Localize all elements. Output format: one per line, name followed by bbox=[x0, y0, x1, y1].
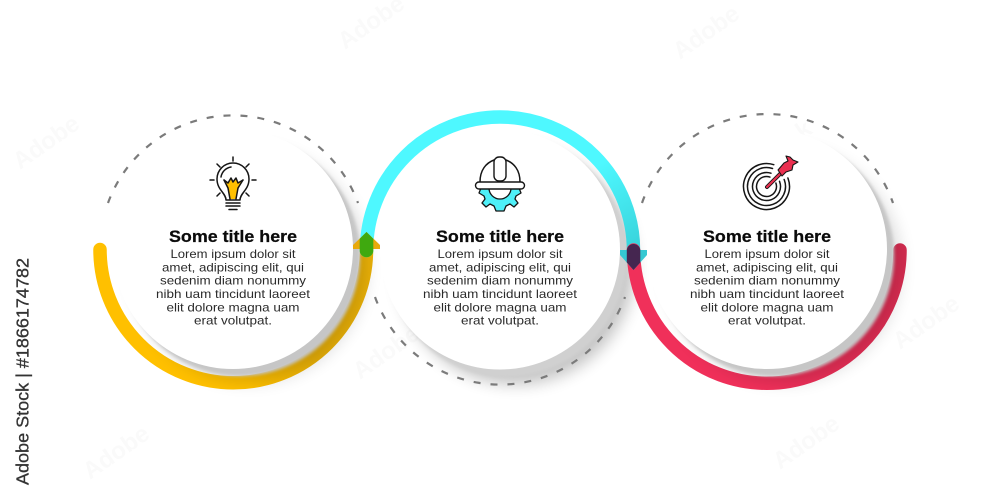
body text: step 3: sedenim diam nonummy bbox=[694, 274, 840, 288]
text: Adobe bbox=[8, 110, 85, 175]
body text: step 2: nibh uam tincidunt laoreet bbox=[423, 287, 578, 301]
body text: step 3: amet, adipiscing elit, qui bbox=[696, 260, 838, 274]
white circle bbox=[647, 129, 887, 369]
icon: helmet and gear bbox=[476, 157, 524, 211]
title: step 2: Some title here bbox=[436, 227, 564, 246]
text: Stock bbox=[748, 115, 818, 175]
body text: step 1: Lorem ipsum dolor sit bbox=[170, 247, 296, 261]
red arc bbox=[634, 250, 900, 383]
arrow: cyan to red junction bbox=[620, 244, 647, 270]
arrow: yellow to cyan junction bbox=[353, 232, 380, 257]
source credit: Adobe Stock | #1866174782 bbox=[12, 258, 32, 485]
title: step 1: Some title here bbox=[169, 227, 297, 246]
yellow arc bbox=[100, 250, 366, 383]
title: step 3: Some title here bbox=[703, 227, 831, 246]
text: Adobe bbox=[348, 320, 425, 385]
body text: step 2: Lorem ipsum dolor sit bbox=[438, 247, 563, 261]
body text: step 2: sedenim diam nonummy bbox=[427, 274, 573, 288]
cyan arc bbox=[366, 117, 634, 251]
panel: step 2 bbox=[366, 117, 634, 385]
text: Adobe bbox=[668, 0, 745, 65]
icon: target with dart bbox=[737, 156, 798, 216]
panel: step 1 bbox=[100, 115, 367, 383]
body text: step 1: erat volutpat. bbox=[194, 314, 272, 328]
body text: step 1 bbox=[156, 247, 311, 328]
body text: step 1: elit dolore magna uam bbox=[166, 300, 300, 314]
body text: step 2: elit dolore magna uam bbox=[434, 300, 567, 314]
white circle bbox=[380, 130, 620, 370]
text: Adobe bbox=[78, 420, 155, 485]
circle shadow bbox=[120, 136, 367, 383]
white circle bbox=[113, 129, 353, 369]
body text: step 2: amet, adipiscing elit, qui bbox=[429, 260, 571, 274]
dashed arc: step 2 bottom bbox=[375, 297, 625, 385]
panel: step 3 bbox=[634, 114, 901, 383]
dashed arc: step 1 top bbox=[108, 115, 358, 203]
circle shadow bbox=[654, 136, 901, 383]
body text: step 1: amet, adipiscing elit, qui bbox=[162, 260, 304, 274]
body text: step 3: nibh uam tincidunt laoreet bbox=[690, 287, 845, 301]
text: Adobe bbox=[768, 410, 845, 475]
text: Adobe bbox=[888, 290, 965, 355]
body text: step 3 bbox=[690, 247, 845, 328]
body text: step 1: nibh uam tincidunt laoreet bbox=[156, 287, 311, 301]
body text: step 2: erat volutpat. bbox=[461, 314, 539, 328]
body text: step 3: elit dolore magna uam bbox=[700, 300, 834, 314]
dashed arc: step 3 top bbox=[642, 114, 893, 203]
circle shadow bbox=[387, 137, 634, 384]
body text: step 2 bbox=[423, 247, 578, 328]
body text: step 1: sedenim diam nonummy bbox=[160, 274, 306, 288]
icon: light bulb bbox=[210, 157, 256, 210]
body text: step 3: Lorem ipsum dolor sit bbox=[704, 247, 830, 261]
body text: step 3: erat volutpat. bbox=[728, 314, 806, 328]
